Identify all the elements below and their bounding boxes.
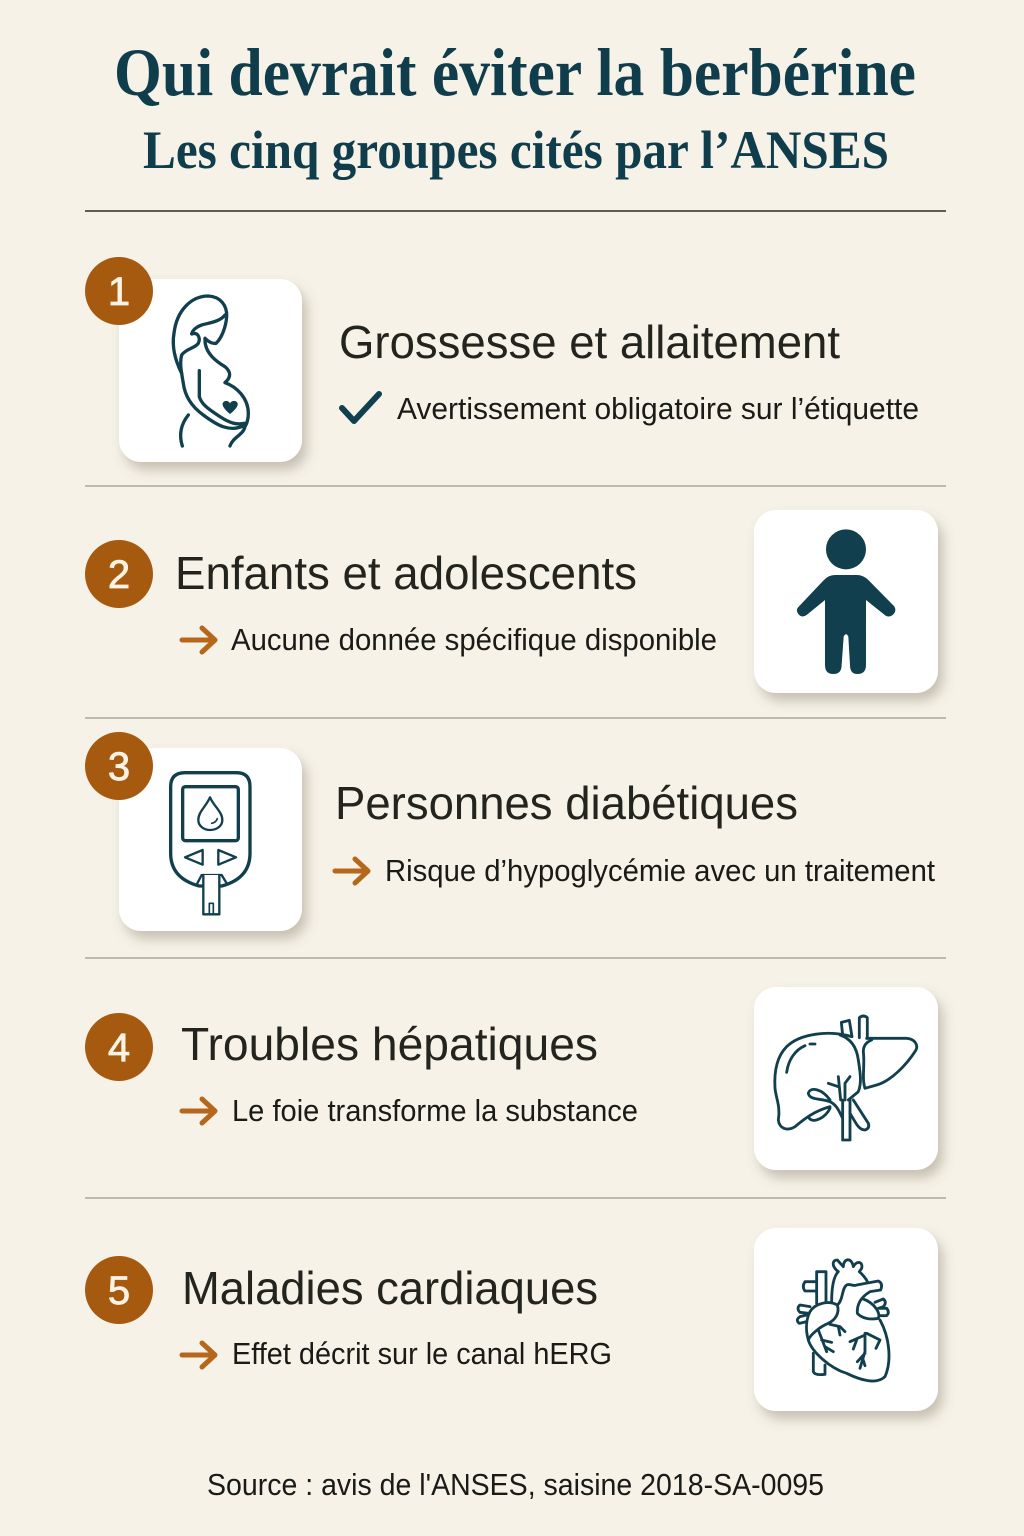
panel: enfants et adolescents (85, 510, 938, 693)
panel: maladies cardiaques (85, 1228, 938, 1411)
badge 4 (85, 1013, 153, 1081)
badge 3: 3 (108, 745, 130, 789)
badge 3 (85, 732, 153, 800)
icon: arrow (182, 628, 215, 652)
icon card: glucose meter (119, 748, 302, 931)
badge 2 (85, 540, 153, 608)
description: Le foie transforme la substance (232, 1093, 638, 1128)
icon: arrow (182, 1343, 215, 1367)
heading: Maladies cardiaques (182, 1262, 598, 1314)
description: Aucune donnée spécifique disponible (231, 622, 717, 657)
icon card: child (754, 510, 938, 693)
heading: Grossesse et allaitement (339, 316, 840, 368)
panel: personnes diabétiques (85, 732, 935, 931)
icon card: heart (754, 1228, 938, 1411)
icon: arrow (335, 859, 368, 883)
subtitle: Les cinq groupes cités par l’ANSES (143, 120, 889, 180)
icon card: pregnant woman (119, 279, 302, 462)
heading: Enfants et adolescents (175, 547, 637, 599)
badge 1: 1 (108, 270, 130, 314)
icon: check mark (342, 394, 379, 421)
heading: Troubles hépatiques (181, 1018, 598, 1070)
title: Qui devrait éviter la berbérine (114, 34, 916, 110)
description: Effet décrit sur le canal hERG (232, 1336, 612, 1371)
source note: Source : avis de l'ANSES, saisine 2018-SA-0095 (207, 1467, 824, 1502)
badge 2: 2 (108, 553, 130, 597)
heading: Personnes diabétiques (335, 777, 798, 829)
icon: arrow (182, 1099, 215, 1123)
description: Avertissement obligatoire sur l’étiquette (397, 391, 919, 426)
badge 5 (85, 1256, 153, 1324)
badge 1 (85, 257, 153, 325)
icon card: liver (754, 987, 938, 1170)
badge 5: 5 (108, 1269, 130, 1313)
description: Risque d’hypoglycémie avec un traitement (385, 853, 935, 888)
badge 4: 4 (108, 1026, 130, 1070)
panel: troubles hépatiques (85, 987, 938, 1170)
panel: grossesse et allaitement (85, 257, 919, 462)
